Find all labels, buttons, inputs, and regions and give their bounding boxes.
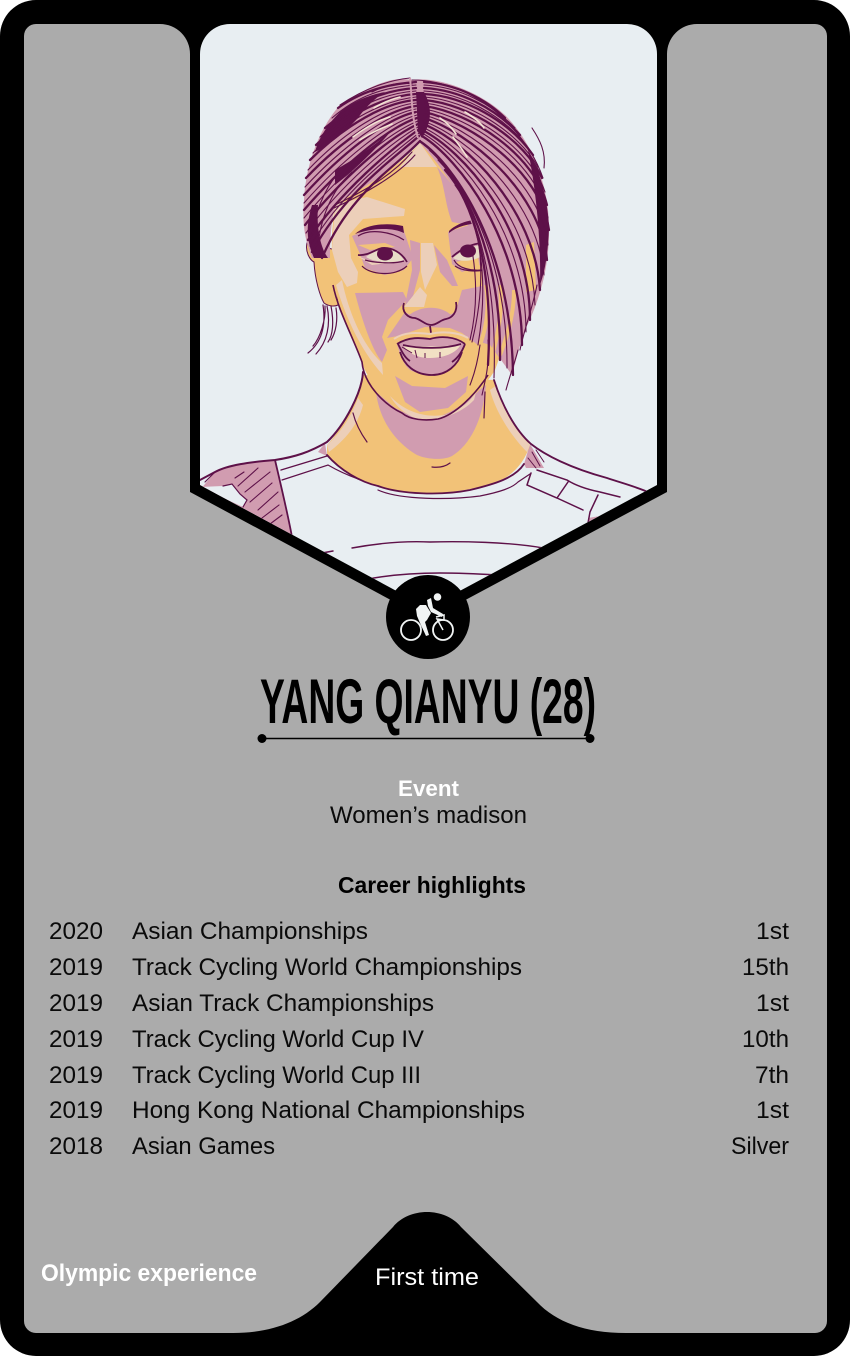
career highlights table: 15th [742, 954, 789, 981]
neck [327, 375, 530, 493]
cheek left shadow [355, 292, 407, 362]
forehead shadow [437, 167, 472, 226]
rider arm [427, 598, 443, 617]
hair parting [410, 78, 418, 138]
cyclist head [434, 593, 441, 601]
cheek right shadow [450, 286, 482, 344]
career highlights table: 1st [756, 1097, 789, 1124]
bike wheels [401, 620, 453, 640]
upper lip shadow [387, 312, 454, 338]
career highlights table [49, 918, 789, 1160]
hair skin tone gaps [478, 284, 516, 356]
career highlights table: 2019 [49, 1097, 103, 1124]
hair [303, 78, 549, 395]
shoulder shading [200, 443, 600, 540]
career highlights table: 1st [756, 990, 789, 1017]
jaw line [333, 285, 488, 420]
career highlights heading: Career highlights [338, 872, 526, 898]
chin shadow [395, 376, 468, 412]
portrait background [195, 20, 665, 620]
eye right [449, 219, 484, 271]
event block: Event [398, 776, 460, 801]
career highlights table: 10th [742, 1026, 789, 1053]
hair strands right [421, 82, 549, 375]
olympic experience label: Olympic experience [41, 1260, 257, 1287]
career highlights table: Track Cycling World Championships [132, 954, 522, 981]
career highlights table: 2019 [49, 954, 103, 981]
career highlights table: Track Cycling World Cup IV [132, 1026, 424, 1053]
title underline [258, 734, 594, 743]
bike frame [436, 615, 444, 630]
career highlights table: 2020 [49, 918, 103, 945]
hair strands left [304, 82, 420, 258]
career highlights table: Track Cycling World Cup III [132, 1062, 421, 1089]
career highlights table: 2019 [49, 1026, 103, 1053]
career highlights table: Asian Track Championships [132, 990, 434, 1017]
career highlights table: 2019 [49, 1062, 103, 1089]
hair dark masses [315, 92, 385, 152]
nose shading [405, 240, 420, 305]
career highlights table: 2019 [49, 990, 103, 1017]
mouth [394, 332, 468, 375]
olympic experience value: First time [375, 1264, 479, 1291]
nose [403, 302, 456, 333]
career highlights table: 7th [755, 1062, 789, 1089]
neck and shirt outlines [200, 372, 650, 579]
career highlights table: Silver [731, 1133, 789, 1160]
career highlights table: Asian Games [132, 1133, 275, 1160]
event block [330, 776, 527, 829]
career highlights table: Hong Kong National Championships [132, 1097, 525, 1124]
title: YANG QIANYU (28) [260, 667, 596, 737]
career highlights table: Asian Championships [132, 918, 368, 945]
career highlights table: 2018 [49, 1133, 103, 1160]
eye socket left [352, 226, 413, 275]
eye socket right [448, 225, 482, 272]
event block: Women’s madison [330, 802, 527, 829]
ear left [307, 243, 338, 306]
hair highlights [353, 97, 484, 157]
eye left [355, 224, 407, 274]
career highlights table: 1st [756, 918, 789, 945]
rider thigh and leg [416, 605, 431, 636]
face [332, 143, 511, 420]
icon: cyclist badge [386, 575, 470, 659]
forehead highlight [400, 143, 437, 167]
portrait illustration [195, 20, 665, 620]
wisps left [308, 305, 337, 354]
